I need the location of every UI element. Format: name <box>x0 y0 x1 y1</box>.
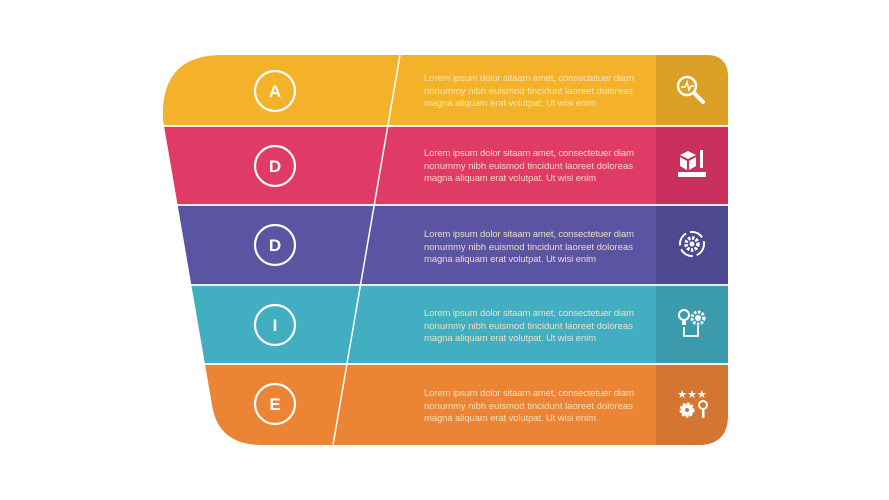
row D1 <box>150 126 750 205</box>
letters: I <box>273 316 277 335</box>
body text: nonummy nibh euismod tincidunt laoreet doloreas <box>424 86 633 97</box>
letters: A <box>269 82 281 101</box>
letters: D <box>269 157 281 176</box>
body text: nonummy nibh euismod tincidunt laoreet doloreas <box>424 242 633 253</box>
body text: Lorem ipsum dolor sitaam amet, consectetuer diam <box>424 229 634 240</box>
body text: nonummy nibh euismod tincidunt laoreet doloreas <box>424 401 633 412</box>
body text: magna aliquam erat volutpat. Ut wisi enim <box>424 413 596 424</box>
row D2 <box>150 205 750 285</box>
body text: magna aliquam erat volutpat. Ut wisi enim <box>424 98 596 109</box>
icon: stars gear key <box>677 389 707 418</box>
body text <box>424 73 634 424</box>
icon: stars gear key: ★★★ <box>677 389 707 401</box>
letters <box>269 82 281 414</box>
letters: D <box>269 236 281 255</box>
body text: Lorem ipsum dolor sitaam amet, consectetuer diam <box>424 308 634 319</box>
body text: nonummy nibh euismod tincidunt laoreet doloreas <box>424 321 633 332</box>
body text: magna aliquam erat volutpat. Ut wisi enim <box>424 333 596 344</box>
letter circles <box>255 71 295 424</box>
infographic body <box>150 50 750 450</box>
body text: nonummy nibh euismod tincidunt laoreet doloreas <box>424 161 633 172</box>
row E <box>205 364 728 445</box>
icon: bulb gear flow <box>679 310 704 336</box>
body text: magna aliquam erat volutpat. Ut wisi enim <box>424 254 596 265</box>
body text: magna aliquam erat volutpat. Ut wisi enim <box>424 173 596 184</box>
body text: Lorem ipsum dolor sitaam amet, consectetuer diam <box>424 73 634 84</box>
letters: E <box>269 395 281 414</box>
body text: Lorem ipsum dolor sitaam amet, consectetuer diam <box>424 388 634 399</box>
icon: box and ruler <box>678 150 706 177</box>
icon: magnifier <box>678 77 703 102</box>
icon: gear cycle <box>680 232 704 256</box>
body text: Lorem ipsum dolor sitaam amet, consectetuer diam <box>424 148 634 159</box>
row A <box>162 55 728 126</box>
row I <box>191 285 728 364</box>
